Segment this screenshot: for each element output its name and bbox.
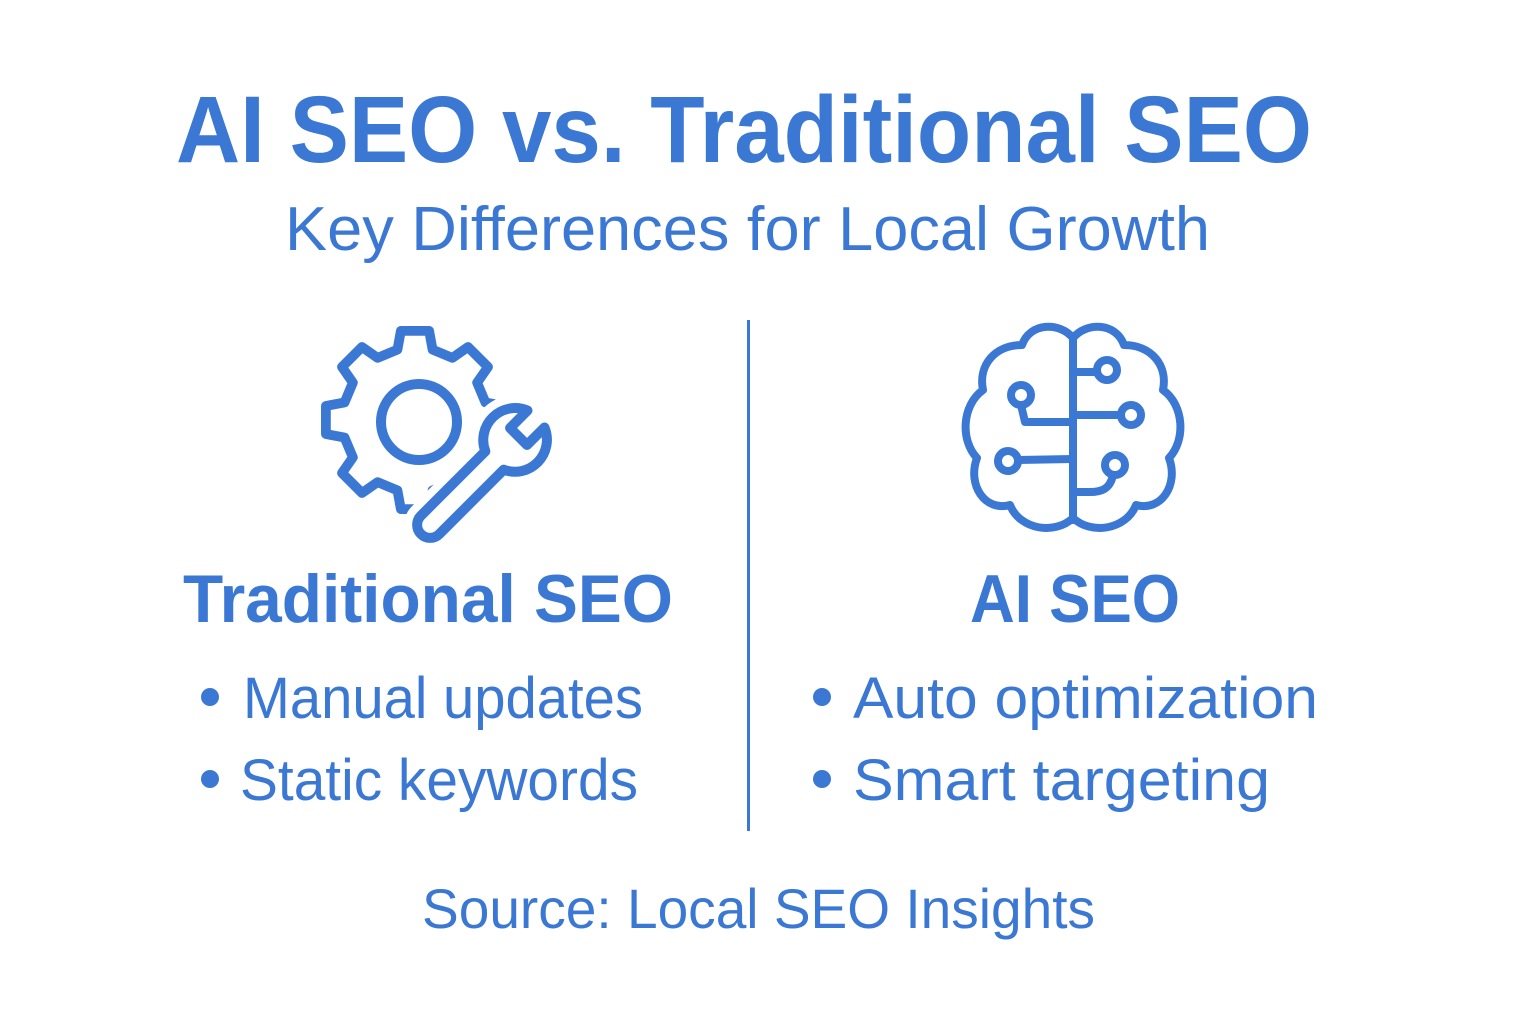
heading: Traditional SEO: Traditional SEO [183,561,673,637]
list: traditional: Static keywords [240,748,638,813]
icon: brain circuit [966,327,1180,528]
list: traditional: Manual updates [243,666,643,731]
list: AI [813,666,1318,813]
title: AI SEO vs. Traditional SEO [176,77,1312,183]
divider [747,320,750,831]
heading: AI SEO: AI SEO [970,561,1180,637]
list: AI: Auto optimization [853,666,1318,731]
source: Source: Local SEO Insights [422,877,1095,940]
icon: gear and wrench [326,331,558,557]
list: AI: Smart targeting [853,748,1270,813]
list: traditional [201,666,643,813]
subtitle: Key Differences for Local Growth [285,195,1210,264]
